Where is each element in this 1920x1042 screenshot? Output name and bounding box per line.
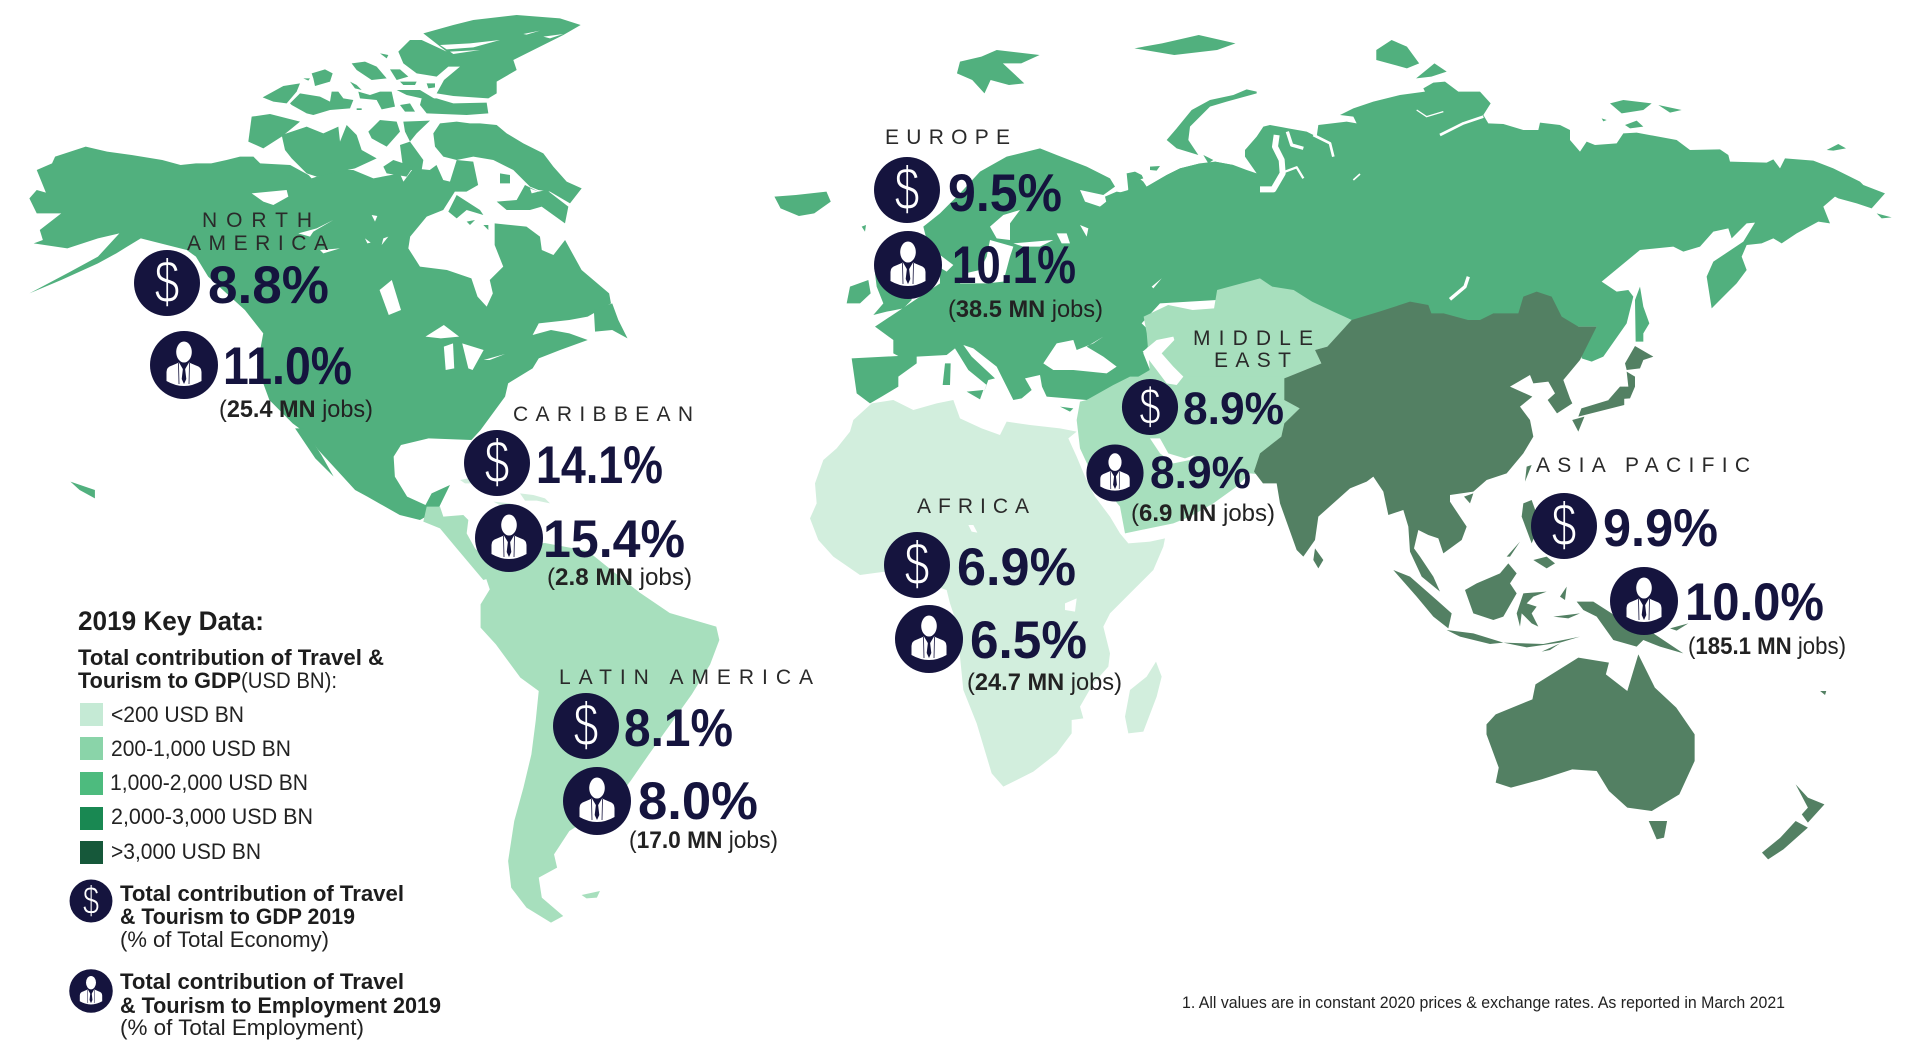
- legend subtitle: Tourism to GDP: [78, 668, 241, 693]
- legend: [69, 606, 441, 1040]
- swatch: 2,000 to 3,000: 2,000-3,000 USD BN: [111, 804, 313, 829]
- icon: person: [1086, 444, 1144, 502]
- icon: person: [475, 504, 543, 572]
- label: Middle East: MIDDLE: [1193, 327, 1313, 350]
- key text: GDP: & Tourism to GDP 2019: [120, 904, 355, 929]
- icon: dollar: $: [1552, 491, 1576, 559]
- stat: GDP share: 6.9%: [957, 538, 1076, 597]
- map region: Svalbard and high Arctic islands: [957, 35, 1447, 93]
- inland seas and lakes: [252, 31, 1483, 612]
- icon: person: [69, 969, 113, 1013]
- stat: GDP share: 8.1%: [624, 699, 733, 758]
- stat: GDP share: 8.9%: [1183, 383, 1284, 434]
- region: North America: [134, 209, 373, 423]
- stat: GDP share: 9.9%: [1603, 499, 1718, 558]
- jobs: (6.9 MN jobs): [1131, 500, 1275, 527]
- stat: employment share: 10.1%: [952, 236, 1076, 295]
- icon: dollar: $: [574, 691, 598, 759]
- region: Latin America: [553, 666, 813, 854]
- swatch: 1,000 to 2,000: 1,000-2,000 USD BN: [110, 770, 308, 795]
- key text: employment: & Tourism to Employment 2019: [120, 993, 441, 1018]
- legend subtitle: (USD BN):: [241, 668, 337, 693]
- key text: GDP: [120, 881, 404, 952]
- legend key: GDP icon: [70, 879, 404, 952]
- key text: GDP: (% of Total Economy): [120, 927, 329, 952]
- label: Asia Pacific: ASIA PACIFIC: [1536, 454, 1750, 477]
- jobs: (24.7 MN jobs): [967, 669, 1122, 696]
- icon: dollar: $: [83, 879, 99, 923]
- legend title: 2019 Key Data:: [78, 606, 264, 636]
- icon: dollar: [874, 155, 940, 223]
- jobs: (185.1 MN jobs): [1688, 633, 1846, 660]
- map region: Iceland: [774, 192, 831, 216]
- key text: employment: (% of Total Employment): [120, 1015, 364, 1040]
- icon: person: [563, 767, 631, 835]
- icon: dollar: [884, 530, 950, 598]
- icon: dollar: [464, 428, 530, 496]
- key text: employment: Total contribution of Travel: [120, 969, 404, 994]
- region: Asia Pacific: [1531, 454, 1846, 660]
- icon: dollar: [70, 879, 112, 923]
- stat: GDP share: 14.1%: [536, 436, 663, 495]
- label: North America: AMERICA: [187, 232, 328, 255]
- icon: dollar: [1122, 377, 1178, 435]
- stat: GDP share: 8.8%: [208, 256, 329, 315]
- icon: person: [874, 231, 942, 299]
- icon: dollar: $: [484, 428, 510, 496]
- icon: dollar: $: [1139, 377, 1161, 435]
- key text: GDP: Total contribution of Travel: [120, 881, 404, 906]
- region: Middle East: [1086, 327, 1313, 527]
- jobs: (38.5 MN jobs): [948, 296, 1103, 323]
- label: Middle East: EAST: [1214, 349, 1291, 372]
- stat: employment share: 6.5%: [970, 611, 1087, 670]
- jobs: (25.4 MN jobs): [219, 396, 373, 423]
- map region: Latin America and Caribbean: [423, 478, 719, 923]
- icon: person: [1610, 567, 1678, 635]
- region: Caribbean: [464, 403, 693, 591]
- label: North America: [187, 209, 328, 255]
- stat: employment share: 15.4%: [543, 510, 685, 569]
- footnote: 1. All values are in constant 2020 prices & exchange rates. As reported in March 2021: [1182, 993, 1785, 1012]
- icon: person: [895, 605, 963, 673]
- map region: North America: [29, 147, 628, 520]
- label: North America: NORTH: [202, 209, 312, 232]
- label: Africa: AFRICA: [917, 495, 1029, 518]
- key text: employment: [120, 969, 441, 1040]
- stat: employment share: 8.0%: [638, 772, 758, 831]
- label: Latin America: LATIN AMERICA: [559, 666, 813, 689]
- map region: Middle East: [1077, 278, 1352, 533]
- swatch: 200 to 1,000: 200-1,000 USD BN: [111, 736, 291, 761]
- swatch: under 200: <200 USD BN: [111, 702, 244, 727]
- map region: Russia: [1100, 82, 1892, 362]
- stat: employment share: 8.9%: [1150, 447, 1251, 498]
- legend key: employment icon: [69, 969, 441, 1040]
- label: Caribbean: CARIBBEAN: [513, 403, 693, 426]
- icon: dollar: $: [154, 248, 180, 316]
- stat: GDP share: 9.5%: [948, 164, 1062, 223]
- region: Africa: [884, 495, 1122, 696]
- label: Middle East: [1193, 327, 1313, 372]
- colour scale: [80, 702, 313, 864]
- legend subtitle: [78, 645, 384, 693]
- legend subtitle: Total contribution of Travel &: [78, 645, 384, 670]
- map region: Asia Pacific mainland and islands: [1254, 292, 1826, 859]
- swatch: over 3,000: >3,000 USD BN: [111, 839, 261, 864]
- map region: Europe: [847, 148, 1240, 412]
- region: Europe: [874, 126, 1103, 323]
- stat: employment share: 11.0%: [223, 337, 352, 396]
- icon: dollar: $: [894, 155, 920, 223]
- label: Europe: EUROPE: [885, 126, 1010, 149]
- icon: person: [150, 331, 218, 399]
- map region: Canadian Arctic islands: [248, 15, 582, 230]
- Russian Far East islands: [1602, 100, 1892, 342]
- icon: dollar: $: [904, 530, 930, 598]
- icon: dollar: [134, 248, 200, 316]
- icon: dollar: [553, 691, 619, 759]
- map region: Africa: [810, 400, 1165, 787]
- jobs: (17.0 MN jobs): [629, 827, 778, 854]
- jobs: (2.8 MN jobs): [547, 564, 692, 591]
- stat: employment share: 10.0%: [1685, 573, 1824, 632]
- icon: dollar: [1531, 491, 1597, 559]
